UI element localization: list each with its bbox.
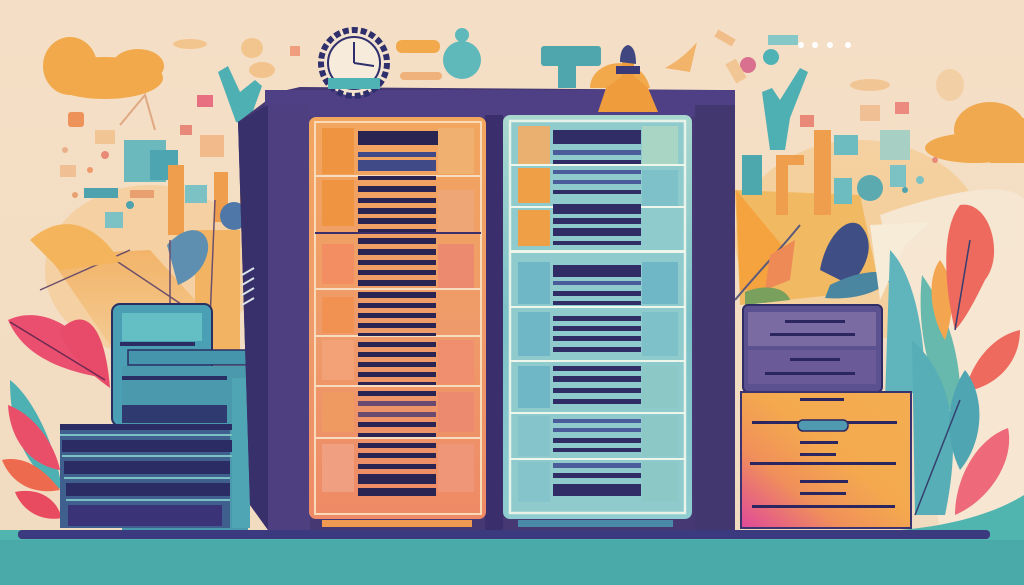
- scattered icons: left cluster: [60, 95, 290, 235]
- rack slots: left columns: [315, 128, 481, 492]
- cloud: top right: [925, 102, 1024, 163]
- filing cabinet: right: [741, 305, 911, 528]
- cloud: top left: [43, 37, 164, 99]
- scattered icons: right cluster: [735, 102, 938, 300]
- scattered icons: top band: [173, 28, 964, 101]
- rack stripes: left: [358, 131, 438, 496]
- rack: left orange: [309, 117, 486, 519]
- cabinet body: [238, 87, 735, 530]
- rack stripes: right: [553, 130, 641, 496]
- plant: right dark leaves behind cabinet: [745, 222, 930, 305]
- teal leaf by cabinet: [249, 320, 288, 375]
- teal hill and floor: [0, 495, 1024, 585]
- rack slots: right columns: [510, 126, 685, 502]
- floor line: [18, 530, 990, 539]
- gauge icon on top: [321, 30, 387, 96]
- plant: left pink leaves: [2, 315, 110, 519]
- rack: right teal: [503, 115, 692, 519]
- cabinet base bars: [322, 520, 673, 527]
- background haze: warm patches: [45, 140, 1024, 530]
- teal figures beside cabinet: [218, 66, 808, 150]
- server stack: left: [60, 304, 250, 531]
- plant: right teal leaves: [885, 205, 1020, 515]
- bottle icon on top: [598, 45, 658, 112]
- plant: left background leaf: [30, 200, 215, 320]
